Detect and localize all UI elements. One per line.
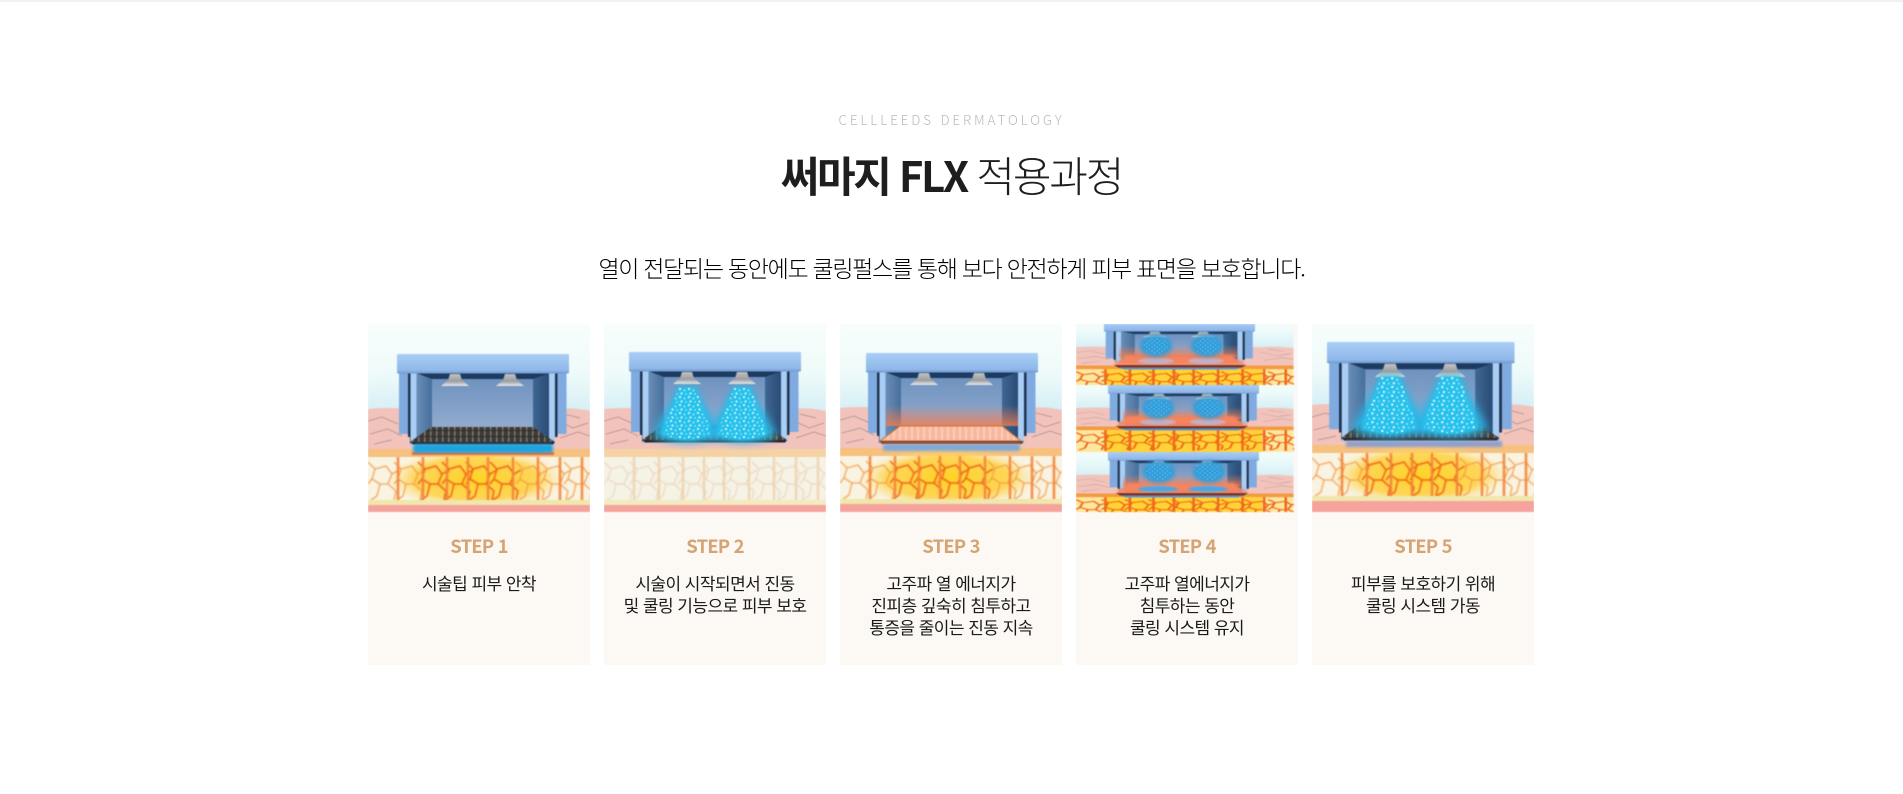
stage one — [1076, 324, 1295, 386]
step description: 고주파 열 에너지가 — [886, 570, 1016, 595]
step description: 진피층 깊숙히 침투하고 — [871, 592, 1031, 617]
step description — [1125, 570, 1250, 639]
step description: 쿨링 시스템 가동 — [1366, 592, 1480, 617]
step description — [869, 570, 1033, 639]
subtitle text: 열이 전달되는 동안에도 쿨링펄스를 통해 보다 안전하게 피부 표면을 보호합니다. — [598, 250, 1305, 284]
step description: 시술이 시작되면서 진동 — [635, 570, 795, 595]
step description: 시술팁 피부 안착 — [422, 570, 536, 595]
panel: step 3 — [840, 324, 1062, 665]
panel: step 4 — [1076, 324, 1298, 665]
illustration: cooling spray on pale skin — [604, 344, 826, 512]
step description: 고주파 열에너지가 — [1125, 570, 1249, 595]
step description: 침투하는 동안 — [1140, 592, 1234, 617]
step description: 통증을 줄이는 진동 지속 — [869, 614, 1033, 639]
eyebrow label: CELLLEEDS DERMATOLOGY — [838, 109, 1064, 129]
title: 써마지 FLX 적용과정 — [781, 144, 1122, 205]
step label: STEP 2 — [686, 533, 744, 559]
step description — [624, 570, 806, 617]
step label: STEP 3 — [922, 533, 980, 559]
step description: 및 쿨링 기능으로 피부 보호 — [624, 592, 806, 617]
step label: STEP 4 — [1158, 533, 1216, 559]
illustration: three stacked stages — [1076, 324, 1295, 513]
panel: step 5 — [1312, 324, 1534, 665]
panel: step 1 — [368, 324, 590, 665]
step description: 쿨링 시스템 유지 — [1130, 614, 1244, 639]
stage three — [1076, 452, 1295, 513]
step description — [1351, 570, 1495, 617]
illustration: radio-frequency heat — [840, 343, 1062, 512]
stage two — [1076, 384, 1295, 453]
step description: 피부를 보호하기 위해 — [1351, 570, 1495, 595]
step label: STEP 1 — [450, 533, 508, 559]
panel: step 2 — [604, 324, 826, 665]
step label: STEP 5 — [1394, 533, 1452, 559]
illustration: tip placed on skin — [368, 344, 590, 512]
illustration: cooling system running — [1312, 340, 1534, 512]
